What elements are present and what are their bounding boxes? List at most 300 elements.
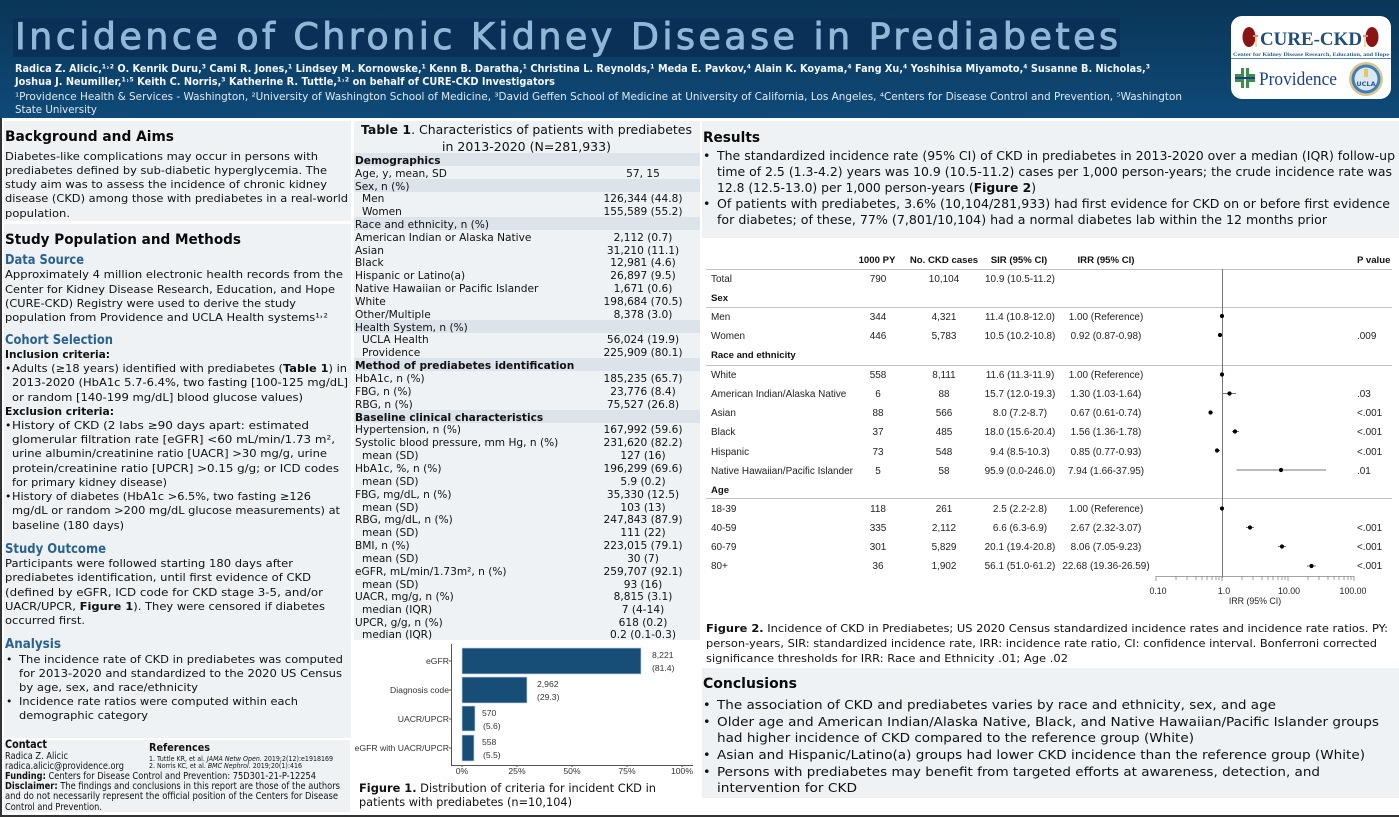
text: analysis: The incidence rate of CKD in prediabetes was computed: [18, 653, 343, 666]
text: results bullet 1: The standardized incidence rate (95% CI) of CKD in prediabetes in 2013-2020 over a median (IQR) follow-up: [716, 148, 1395, 163]
table section: demographics: 26,897 (9.5): [610, 270, 676, 282]
panel: study population and methods: [4, 224, 351, 738]
category labels: UACR/UPCR: [398, 714, 449, 724]
group: race and ethnicity: 6: [875, 389, 881, 400]
panel: contact, references, funding: [4, 737, 350, 813]
text: results bullet 1: 12.8 (12.5-13.0) per 1,000 person-years (Figure 2): [717, 180, 1036, 195]
group: race and ethnicity: 566: [936, 408, 953, 419]
table section: baseline clinical characteristics: median (IQR): [362, 604, 432, 616]
text: analysis: by age, sex, and race/ethnicity: [19, 681, 199, 694]
icon: Providence cross: [1235, 68, 1255, 88]
axis tick labels: 50%: [563, 766, 581, 776]
group: age: <.001: [1357, 542, 1383, 553]
funding and disclaimer: Funding: Centers for Disease Control and Prevention: 75D301-21-P-12254: [5, 771, 316, 782]
table section: baseline clinical characteristics: UPCR, g/g, n (%): [355, 617, 443, 629]
contact: radica.alicic@providence.org: [5, 761, 124, 772]
authors: Radica Z. Alicic,¹˒² O. Kenrik Duru,³ Cami R. Jones,¹ Lindsey M. Kornowske,¹ Kenn B. Daratha,¹ Christina L. Reynolds,¹ Meda E. Pavkov,⁴ Alain K. Koyama,⁴ Fang Xu,⁴ Yoshihisa Miyamoto,⁴ Susanne B. Nicholas,³: [15, 63, 1150, 75]
group: age: 6.6 (6.3-6.9): [993, 523, 1047, 534]
heading: conclusions: Conclusions: [703, 676, 797, 692]
table title: [361, 122, 692, 154]
table section: baseline clinical characteristics: 167,992 (59.6): [603, 424, 683, 436]
heading: background and aims: Background and Aims: [5, 129, 174, 145]
text: exclusion criteria: •: [5, 419, 11, 432]
group: age: 1,902: [932, 561, 957, 572]
group: race and ethnicity: <.001: [1357, 447, 1383, 458]
table section: baseline clinical characteristics: mean (SD): [362, 502, 419, 514]
text: exclusion criteria: for primary kidney disease): [12, 476, 167, 489]
text: background: population.: [5, 207, 70, 220]
row: total: 790: [870, 274, 887, 285]
group: race and ethnicity: <.001: [1357, 408, 1383, 419]
text: conclusions list: had higher incidence of CKD compared to the reference group (White): [717, 731, 1194, 746]
axis tick labels: 25%: [508, 766, 526, 776]
panel: results: [702, 121, 1399, 238]
table section: baseline clinical characteristics: RBG, mg/dL, n (%): [355, 514, 453, 526]
group: race and ethnicity: 548: [936, 447, 953, 458]
group: age: 56.1 (51.0-61.2): [985, 561, 1055, 572]
table section: demographics: Black: [355, 257, 385, 269]
group: age: 20.1 (19.4-20.8): [985, 542, 1055, 553]
group: sex: 344: [870, 312, 887, 323]
group: age: 60-79: [711, 542, 737, 553]
log axis: IRR (95% CI): [1229, 596, 1281, 606]
log axis: 1.0: [1218, 586, 1230, 596]
value labels: 558: [482, 737, 497, 747]
text: background: Diabetes-like complications may occur in persons with: [5, 150, 318, 163]
table section: demographics: Other/Multiple: [355, 309, 431, 321]
title: Incidence of Chronic Kidney Disease in Prediabetes: [15, 15, 1118, 58]
group: race and ethnicity: 485: [936, 427, 953, 438]
group: age: 2,112: [932, 523, 957, 534]
references: [149, 741, 333, 770]
forest plot: figure 2: [706, 255, 1392, 606]
table section: demographics: Women: [362, 206, 402, 218]
value labels: 570: [482, 708, 497, 718]
row: total: 10,104: [929, 274, 960, 285]
table section: demographics: [355, 155, 683, 359]
text: exclusion criteria: protein/creatinine ratio [UPCR] >0.15 g/g; or ICD codes: [12, 462, 339, 475]
table section: method of prediabetes identification: FBG, n (%): [355, 386, 412, 398]
log axis: 0.10: [1149, 586, 1167, 596]
group: age: 36: [872, 561, 884, 572]
text: inclusion criteria: [5, 348, 348, 404]
table section: demographics: American Indian or Alaska Native: [355, 232, 531, 244]
group: race and ethnicity: 8,111: [932, 370, 956, 381]
caption: figure 2: Figure 2. Incidence of CKD in Prediabetes; US 2020 Census standardized incidence rates and incidence rate ratios. PY:: [706, 622, 1388, 635]
caption: figure 2: person-years, SIR: standardized incidence rate, IRR: incidence rate ratio, CI: confidence interval. Bonferroni corrected: [706, 637, 1377, 650]
text: inclusion criteria: •: [5, 362, 11, 375]
table section: baseline clinical characteristics: HbA1c, %, n (%): [355, 463, 441, 475]
text: study outcome: (defined by eGFR, ICD code for CKD stage 3-5, and/or: [5, 586, 324, 599]
group: sex: [711, 293, 1377, 342]
value labels: 2,962: [537, 679, 559, 689]
group: race and ethnicity: 37: [872, 427, 884, 438]
table section: baseline clinical characteristics: Systolic blood pressure, mm Hg, n (%): [355, 437, 558, 449]
group: race and ethnicity: White: [711, 370, 737, 381]
group: race and ethnicity: 88: [938, 389, 950, 400]
category labels: eGFR: [426, 656, 449, 666]
text: exclusion criteria: History of diabetes (HbA1c >6.5%, two fasting ≥126: [12, 490, 311, 503]
text: conclusions list: •: [703, 698, 711, 713]
value labels: (5.6): [483, 721, 501, 731]
category labels: Diagnosis code: [390, 685, 449, 695]
text: conclusions list: •: [703, 765, 711, 780]
group: race and ethnicity: American Indian/Alaska Native: [711, 389, 847, 400]
axis tick labels: [456, 766, 693, 776]
table section: method of prediabetes identification: [355, 360, 683, 411]
confidence intervals: [1209, 394, 1326, 566]
column headers: IRR (95% CI): [1077, 255, 1135, 266]
text: conclusions list: Persons with prediabetes may benefit from targeted efforts at awareness, detection, and: [717, 765, 1320, 780]
table section: demographics: Health System, n (%): [355, 322, 468, 334]
table title: Table 1. Characteristics of patients with prediabetes: [361, 122, 692, 137]
text: conclusions list: Asian and Hispanic/Latino(a) groups had lower CKD incidence than the reference group (White): [717, 748, 1365, 763]
subheading: study outcome: Study Outcome: [5, 542, 106, 557]
group: race and ethnicity: 0.67 (0.61-0.74): [1071, 408, 1141, 419]
contact: [5, 737, 124, 772]
text: conclusions list: The association of CKD and prediabetes varies by race and ethnicity, sex, and age: [716, 698, 1276, 713]
table section: demographics: 225,909 (80.1): [603, 347, 683, 359]
text: inclusion criteria: or random [140-199 mg/dL] blood glucose values): [12, 391, 303, 404]
group: race and ethnicity: 8.0 (7.2-8.7): [993, 408, 1047, 419]
group: race and ethnicity: 1.30 (1.03-1.64): [1071, 389, 1141, 400]
table section: demographics: 2,112 (0.7): [614, 232, 672, 244]
column headers: P value: [1357, 255, 1390, 266]
text: conclusions list: Older age and American Indian/Alaska Native, Black, and Native Hawaiian/Pacific Islander groups: [717, 715, 1379, 730]
column headers: No. CKD cases: [910, 255, 978, 266]
caption: figure 1: Figure 1. Distribution of criteria for incident CKD in: [359, 781, 656, 795]
text: results bullet 2: Of patients with prediabetes, 3.6% (10,104/281,933) had first evidence for CKD on or before first evidence: [717, 196, 1390, 211]
table section: baseline clinical characteristics: 111 (22): [620, 527, 666, 539]
text: inclusion criteria: Inclusion criteria:: [5, 348, 110, 361]
text: exclusion criteria: mg/dL or random >200 mg/dL glucose measurements) at: [12, 504, 340, 517]
caption: figure 1: patients with prediabetes (n=10,104): [359, 795, 572, 809]
table section: baseline clinical characteristics: mean (SD): [362, 553, 419, 565]
CURE-CKD wordmark: CURE-CKD: [1260, 29, 1362, 50]
table section: baseline clinical characteristics: Hypertension, n (%): [355, 424, 461, 436]
group: race and ethnicity: Hispanic: [711, 447, 749, 458]
authors: Joshua J. Neumiller,¹˒⁵ Keith C. Norris,³ Katherine R. Tuttle,¹˒² on behalf of CURE-CKD Investigators: [14, 76, 555, 88]
text: inclusion criteria: 2013-2020 (HbA1c 5.7-6.4%, two fasting [100-125 mg/dL]: [12, 376, 348, 389]
group: race and ethnicity: Asian: [711, 408, 736, 419]
panel: background and aims: [4, 121, 351, 221]
group: race and ethnicity: Black: [711, 427, 735, 438]
table section: baseline clinical characteristics: 0.2 (0.1-0.3): [610, 629, 676, 641]
log axis: [1149, 576, 1367, 606]
text: results bullet 1: time of 2.5 (1.3-4.2) years was 10.9 (10.5-11.2) cases per 1,000 person-years; the crude incidence rate was: [717, 164, 1392, 179]
text: exclusion criteria: urine albumin/creatinine ratio [UACR] >30 mg/g, urine: [12, 447, 327, 460]
text: background: study aim was to assess the incidence of chronic kidney: [5, 178, 328, 191]
table section: baseline clinical characteristics: 196,299 (69.6): [603, 463, 683, 475]
text: exclusion criteria: glomerular filtration rate [eGFR] <60 mL/min/1.73 m²,: [12, 433, 335, 446]
table section: baseline clinical characteristics: eGFR, mL/min/1.73m², n (%): [355, 566, 507, 578]
text: background: prediabetes defined by sub-diabetic hyperglycemia. The: [5, 164, 327, 177]
table section: baseline clinical characteristics: 93 (16): [624, 579, 662, 591]
point estimates: [1208, 314, 1314, 568]
funding and disclaimer: Control and Prevention.: [5, 802, 102, 813]
group: race and ethnicity: 558: [870, 370, 887, 381]
table section: method of prediabetes identification: RBG, n (%): [355, 399, 413, 411]
logos: [1231, 16, 1391, 99]
text: data source: Center for Kidney Disease Research, Education, and Hope: [5, 283, 335, 296]
table section: demographics: Race and ethnicity, n (%): [355, 219, 489, 231]
text: analysis: for 2013-2020 and standardized to the 2020 US Census: [19, 667, 342, 680]
panel: table 1: [354, 121, 700, 641]
group: race and ethnicity: 15.7 (12.0-19.3): [985, 389, 1055, 400]
table section: demographics: Demographics: [355, 155, 441, 167]
table section: baseline clinical characteristics: 127 (16): [620, 450, 666, 462]
table section: baseline clinical characteristics: FBG, mg/dL, n (%): [355, 489, 452, 501]
text: data source: [5, 268, 343, 324]
value labels: (5.5): [483, 750, 501, 760]
table section: demographics: Age, y, mean, SD: [355, 168, 447, 180]
text: analysis: •: [6, 653, 12, 666]
group: age: 1.00 (Reference): [1069, 504, 1143, 515]
table section: demographics: White: [355, 296, 386, 308]
table section: demographics: 31,210 (11.1): [607, 245, 679, 257]
row: total: [711, 274, 1055, 285]
table section: baseline clinical characteristics: 259,707 (92.1): [603, 566, 683, 578]
axis tick labels: 0%: [456, 766, 469, 776]
text: study outcome: Participants were followed starting 180 days after: [5, 557, 294, 570]
group: race and ethnicity: <.001: [1357, 427, 1383, 438]
table section: demographics: Men: [362, 193, 384, 205]
group: age: 2.5 (2.2-2.8): [993, 504, 1047, 515]
log axis: 10.00: [1278, 586, 1300, 596]
group: race and ethnicity: 18.0 (15.6-20.4): [985, 427, 1055, 438]
group: race and ethnicity: 5: [875, 466, 881, 477]
text: exclusion criteria: History of CKD (2 labs ≥90 days apart: estimated: [12, 419, 309, 432]
group: sex: 11.4 (10.8-12.0): [985, 312, 1055, 323]
contact: Radica Z. Alicic: [5, 751, 68, 762]
group: age: 261: [936, 504, 953, 515]
table title: in 2013-2020 (N=281,933): [442, 139, 611, 154]
table section: baseline clinical characteristics: 35,330 (12.5): [607, 489, 679, 501]
table section: baseline clinical characteristics: 223,015 (79.1): [603, 540, 683, 552]
text: exclusion criteria: Exclusion criteria:: [5, 405, 114, 418]
table section: baseline clinical characteristics: Baseline clinical characteristics: [355, 412, 543, 424]
table section: demographics: Sex, n (%): [355, 181, 409, 193]
group: age: 18-39: [711, 504, 737, 515]
funding and disclaimer: Disclaimer: The findings and conclusions in this report are those of the authors: [5, 781, 340, 792]
group: age: 2.67 (2.32-3.07): [1071, 523, 1141, 534]
table section: baseline clinical characteristics: mean (SD): [362, 527, 419, 539]
axis tick labels: 100%: [671, 766, 693, 776]
funding and disclaimer: [5, 771, 340, 813]
text: exclusion criteria: •: [5, 490, 11, 503]
Providence wordmark: Providence: [1259, 69, 1337, 90]
table section: method of prediabetes identification: 23,776 (8.4): [610, 386, 676, 398]
funding and disclaimer: and do not necessarily represent the official position of the Centers for Disease: [5, 791, 338, 802]
table section: baseline clinical characteristics: 5.9 (0.2): [620, 476, 666, 488]
value labels: 8,221: [652, 650, 674, 660]
text: study outcome: [5, 557, 325, 627]
row: total: 10.9 (10.5-11.2): [985, 274, 1055, 285]
group: age: 8.06 (7.05-9.23): [1071, 542, 1141, 553]
group: race and ethnicity: 0.85 (0.77-0.93): [1071, 447, 1141, 458]
bars: [462, 648, 641, 761]
text: exclusion criteria: [5, 405, 340, 532]
text: background: disease (CKD) among those with prediabetes in a real-world: [5, 192, 348, 205]
heading: results: Results: [703, 130, 760, 146]
table section: baseline clinical characteristics: 7 (4-14): [622, 604, 664, 616]
row: total: Total: [711, 274, 732, 285]
table section: demographics: 1,671 (0.6): [614, 283, 672, 295]
text: results bullet 2: •: [703, 196, 710, 211]
group: race and ethnicity: Native Hawaiian/Pacific Islander: [711, 466, 854, 477]
group: race and ethnicity: [711, 350, 1383, 477]
text: study outcome: occurred first.: [5, 614, 85, 627]
table section: demographics: 56,024 (19.9): [607, 334, 679, 346]
group: age: 335: [870, 523, 887, 534]
table section: baseline clinical characteristics: 247,843 (87.9): [603, 514, 683, 526]
group: sex: 4,321: [932, 312, 957, 323]
table section: method of prediabetes identification: Method of prediabetes identification: [355, 360, 574, 372]
text: conclusions list: •: [703, 748, 711, 763]
panel: conclusions: [702, 668, 1399, 798]
subheading: data source: Data Source: [5, 253, 84, 268]
group: sex: Men: [711, 312, 730, 323]
text: background: [5, 150, 348, 220]
column headers: 1000 PY: [859, 255, 896, 266]
icon: UCLA seal: UCLA: [1356, 80, 1376, 88]
table section: demographics: 126,344 (44.8): [603, 193, 683, 205]
table section: baseline clinical characteristics: 231,620 (82.2): [603, 437, 683, 449]
group: race and ethnicity: .01: [1357, 466, 1371, 477]
table section: baseline clinical characteristics: median (IQR): [362, 629, 432, 641]
group: race and ethnicity: 9.4 (8.5-10.3): [990, 447, 1050, 458]
caption: figure 2: [706, 622, 1388, 665]
group: sex: Women: [711, 331, 745, 342]
table section: demographics: Providence: [362, 347, 420, 359]
table section: baseline clinical characteristics: 618 (0.2): [619, 617, 667, 629]
icon: kidneys: [1242, 27, 1378, 47]
table section: demographics: 12,981 (4.6): [610, 257, 676, 269]
group: sex: 5,783: [932, 331, 957, 342]
column headers: [859, 255, 1390, 266]
table section: demographics: 57, 15: [626, 168, 660, 180]
table section: baseline clinical characteristics: 103 (13): [620, 502, 666, 514]
group: race and ethnicity: 7.94 (1.66-37.95): [1068, 466, 1144, 477]
table section: demographics: 8,378 (3.0): [614, 309, 672, 321]
text: results bullet 1: •: [703, 148, 710, 163]
table section: baseline clinical characteristics: 30 (7): [627, 553, 659, 565]
caption: figure 2: significance thresholds for IRR: Race and Ethnicity .01; Age .02: [706, 652, 1068, 665]
table section: baseline clinical characteristics: 8,815 (3.1): [614, 591, 672, 603]
group: age: <.001: [1357, 523, 1383, 534]
group: race and ethnicity: 1.00 (Reference): [1069, 370, 1143, 381]
group: age: 40-59: [711, 523, 737, 534]
group: sex: Sex: [711, 293, 729, 304]
reference line: [1222, 269, 1224, 578]
text: analysis: Incidence rate ratios were computed within each: [19, 695, 298, 708]
axis tick labels: 75%: [618, 766, 636, 776]
references: References: [149, 741, 210, 754]
caption: figure 1: [359, 781, 656, 809]
log axis: 100.00: [1340, 586, 1367, 596]
column headers: SIR (95% CI): [991, 255, 1047, 266]
group: sex: 0.92 (0.87-0.98): [1071, 331, 1141, 342]
group: sex: 1.00 (Reference): [1069, 312, 1143, 323]
text: analysis: [6, 653, 343, 722]
group: race and ethnicity: Race and ethnicity: [711, 350, 796, 361]
bar chart: figure 1: [355, 644, 693, 776]
subheading: analysis: Analysis: [5, 637, 61, 652]
table section: demographics: Hispanic or Latino(a): [355, 270, 465, 282]
heading: study population and methods: Study Population and Methods: [5, 232, 241, 248]
table section: method of prediabetes identification: 185,235 (65.7): [603, 373, 683, 385]
group: sex: 10.5 (10.2-10.8): [985, 331, 1055, 342]
text: results bullet 2: for diabetes; of these, 77% (7,801/10,104) had a normal diabetes lab within the 12 months prior: [717, 212, 1328, 227]
group: race and ethnicity: 1.56 (1.36-1.78): [1071, 427, 1141, 438]
group: race and ethnicity: 88: [872, 408, 884, 419]
affiliations: State University: [15, 104, 97, 116]
references: 1. Tuttle KR, et al. JAMA Netw Open. 2019;2(12):e1918169: [149, 755, 333, 763]
group: race and ethnicity: 11.6 (11.3-11.9): [986, 370, 1054, 381]
text: inclusion criteria: Adults (≥18 years) identified with prediabetes ( Table 1) in: [12, 362, 347, 375]
axes: [449, 644, 693, 767]
table section: baseline clinical characteristics: [355, 412, 683, 641]
group: race and ethnicity: 73: [872, 447, 884, 458]
value labels: (81.4): [652, 663, 675, 673]
group: age: 80+: [711, 561, 728, 572]
group: age: 301: [870, 542, 887, 553]
affiliations: ¹Providence Health & Services - Washington, ²University of Washington School of Medicine, ³David Geffen School of Medicine at University of California, Los Angeles, ⁴Centers for Disease Control and Prevention, ⁵Washington: [15, 91, 1182, 103]
contact: Contact: [5, 737, 47, 751]
category labels: eGFR with UACR/UPCR: [355, 743, 449, 753]
text: results bullet 2: [703, 196, 1390, 227]
text: data source: Approximately 4 million electronic health records from the: [5, 268, 343, 281]
references: 2. Norris KC, et al. BMC Nephrol. 2019;20(1):416: [149, 762, 302, 770]
text: conclusions list: [703, 698, 1379, 796]
table section: demographics: 198,684 (70.5): [603, 296, 683, 308]
table section: method of prediabetes identification: 75,527 (26.8): [607, 399, 679, 411]
category labels: [355, 656, 449, 753]
table section: demographics: 155,589 (55.2): [603, 206, 683, 218]
group: age: Age: [711, 485, 729, 496]
icon: UCLA seal: [1349, 62, 1383, 96]
text: study outcome: UACR/UPCR, Figure 1 ). They were censored if diabetes: [5, 600, 325, 613]
text: exclusion criteria: baseline (180 days): [12, 519, 124, 532]
table section: demographics: Native Hawaiian or Pacific Islander: [355, 283, 539, 295]
text: conclusions list: intervention for CKD: [717, 781, 857, 796]
text: data source: (CURE-CKD) Registry were used to derive the study: [5, 297, 297, 310]
value labels: (29.3): [537, 692, 560, 702]
text: analysis: •: [6, 695, 12, 708]
table section: baseline clinical characteristics: mean (SD): [362, 450, 419, 462]
value labels: [482, 650, 675, 760]
group: sex: .009: [1357, 331, 1377, 342]
group: race and ethnicity: 95.9 (0.0-246.0): [985, 466, 1055, 477]
group: sex: 446: [870, 331, 887, 342]
group: age: [711, 485, 1383, 572]
table section: baseline clinical characteristics: mean (SD): [362, 579, 419, 591]
text: results bullet 1: [703, 148, 1395, 195]
table section: demographics: UCLA Health: [362, 334, 429, 346]
table section: demographics: Asian: [355, 245, 384, 257]
text: conclusions list: •: [703, 715, 711, 730]
group: race and ethnicity: 58: [938, 466, 950, 477]
text: data source: population from Providence and UCLA Health systems¹˒²: [5, 311, 328, 324]
group: age: 5,829: [932, 542, 957, 553]
table section: baseline clinical characteristics: UACR, mg/g, n (%): [355, 591, 454, 603]
table section: method of prediabetes identification: HbA1c, n (%): [355, 373, 425, 385]
group: age: 22.68 (19.36-26.59): [1062, 561, 1150, 572]
CURE-CKD subtitle: Center for Kidney Disease Research, Education, and Hope: [1233, 52, 1390, 58]
text: study outcome: prediabetes identification, until first evidence of CKD: [5, 571, 311, 584]
group: age: <.001: [1357, 561, 1383, 572]
affiliations: [15, 91, 1182, 116]
